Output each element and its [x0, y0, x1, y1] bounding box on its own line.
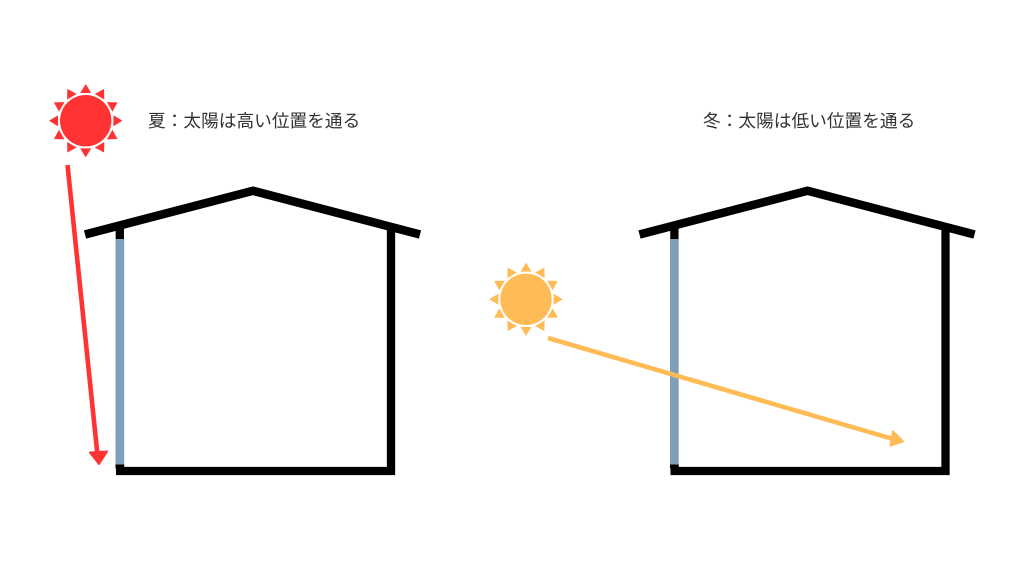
window: summer — [116, 239, 124, 467]
heading: winter: 冬：太陽は低い位置を通る — [703, 111, 915, 131]
icon: winter sun — [489, 263, 563, 336]
heading: summer: 夏：太陽は高い位置を通る — [148, 111, 360, 131]
arrow: winter sunlight — [548, 338, 903, 446]
arrow: summer sunlight — [68, 165, 107, 464]
panel: summer — [49, 84, 420, 471]
house: summer — [85, 191, 420, 471]
house: winter — [640, 191, 974, 471]
icon: summer sun — [49, 84, 122, 157]
panel: winter — [489, 111, 974, 471]
window: winter — [670, 239, 679, 467]
